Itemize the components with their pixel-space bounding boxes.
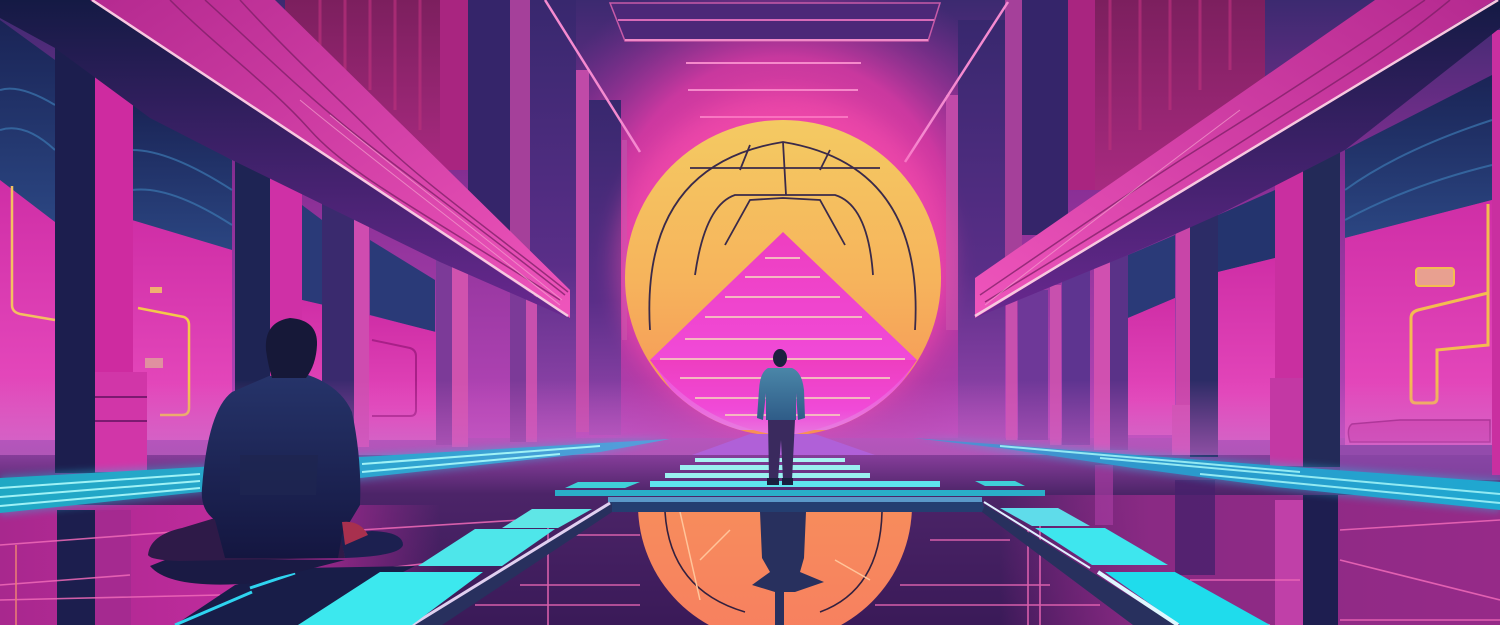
lower-right walkway: [982, 502, 1270, 625]
left back wall columns: [285, 0, 640, 440]
standing person: [757, 349, 805, 485]
left beam: [0, 0, 570, 318]
left pink wall panels: [0, 180, 436, 440]
column reflections: [57, 465, 1338, 625]
wall base fog: [0, 380, 1500, 455]
pyramid: [650, 232, 917, 430]
standing person reflection: [752, 512, 824, 625]
floor: [0, 438, 1500, 625]
right back wall columns: [905, 0, 1265, 440]
central glowing steps: [555, 434, 1045, 496]
seated person: [148, 318, 403, 561]
glowing sphere with pyramid: [625, 120, 941, 436]
sphere glow: [615, 94, 951, 430]
lower-left walkway: [175, 503, 612, 625]
right wave panels: [1128, 75, 1492, 318]
pyramid light bars: [660, 258, 905, 415]
seated person reflection: [150, 558, 345, 585]
middle columns: [235, 150, 1218, 457]
floor grid lines: [0, 515, 1500, 625]
central platform: [608, 497, 985, 512]
right cyan floor strip: [913, 437, 1500, 512]
near columns: [55, 30, 1500, 480]
sphere crack lines: [649, 142, 916, 330]
right pink wall panels: [1128, 200, 1492, 445]
left cyan floor strip: [0, 438, 670, 515]
ceiling lights: [610, 3, 940, 117]
right beam: [975, 0, 1500, 318]
sphere reflection: [638, 512, 912, 625]
left wave panels: [0, 20, 435, 332]
